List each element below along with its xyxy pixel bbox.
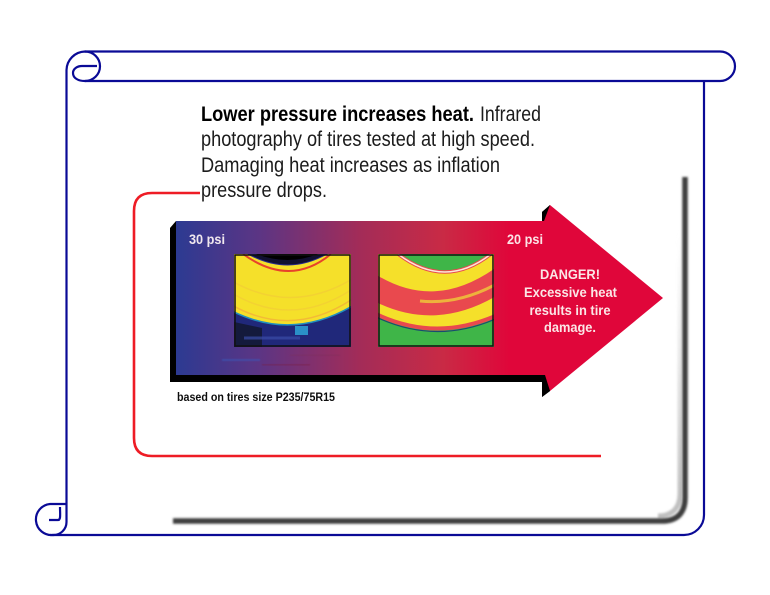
- scroll top roll: [85, 52, 735, 81]
- label: 20 psi: 20 psi: [507, 232, 543, 247]
- tread edge line: [370, 314, 502, 332]
- heading line 1 bold: Lower pressure increases heat.: [201, 102, 474, 126]
- danger line 1: DANGER!: [540, 266, 600, 282]
- scroll right edge and bottom: [50, 81, 704, 535]
- tire heat stripes: [230, 278, 354, 310]
- heading text: [201, 102, 541, 202]
- pressure arrow: [170, 205, 663, 397]
- arrow black shadow: [170, 205, 550, 397]
- white rim arc: [398, 254, 491, 272]
- heading line 1 regular: Infrared: [480, 102, 541, 126]
- red hot band: [370, 278, 502, 303]
- top green arc: [398, 254, 491, 272]
- yellow streak in band: [420, 282, 500, 302]
- red bracket line: [134, 193, 601, 456]
- arrow head: [508, 205, 663, 391]
- heading line 2: photography of tires tested at high speed.: [201, 127, 535, 151]
- danger line 2: Excessive heat: [524, 284, 617, 300]
- heading line 3: Damaging heat increases as inflation: [201, 153, 500, 177]
- tire rim arcs: [243, 254, 331, 271]
- danger callout: [524, 266, 617, 335]
- heading line 4: pressure drops.: [201, 178, 327, 202]
- scroll left edge and top curl: [66, 52, 100, 504]
- lower red band: [370, 311, 502, 329]
- smudges under the images: [222, 355, 340, 365]
- infrared tire image at 30 psi: [234, 254, 351, 347]
- scroll frame: [36, 52, 735, 535]
- danger line 3: results in tire: [530, 302, 611, 318]
- drop shadow of white panel: [173, 177, 685, 521]
- label: 30 psi: 30 psi: [189, 232, 225, 247]
- infrared tire image at 20 psi: [378, 254, 494, 347]
- danger line 4: damage.: [544, 319, 596, 335]
- scroll bottom curl: [36, 504, 67, 535]
- arrow gradient body: [176, 221, 546, 375]
- footnote: based on tires size P235/75R15: [177, 392, 336, 404]
- cool ground area: [230, 305, 354, 350]
- overheated tire body: [370, 250, 500, 329]
